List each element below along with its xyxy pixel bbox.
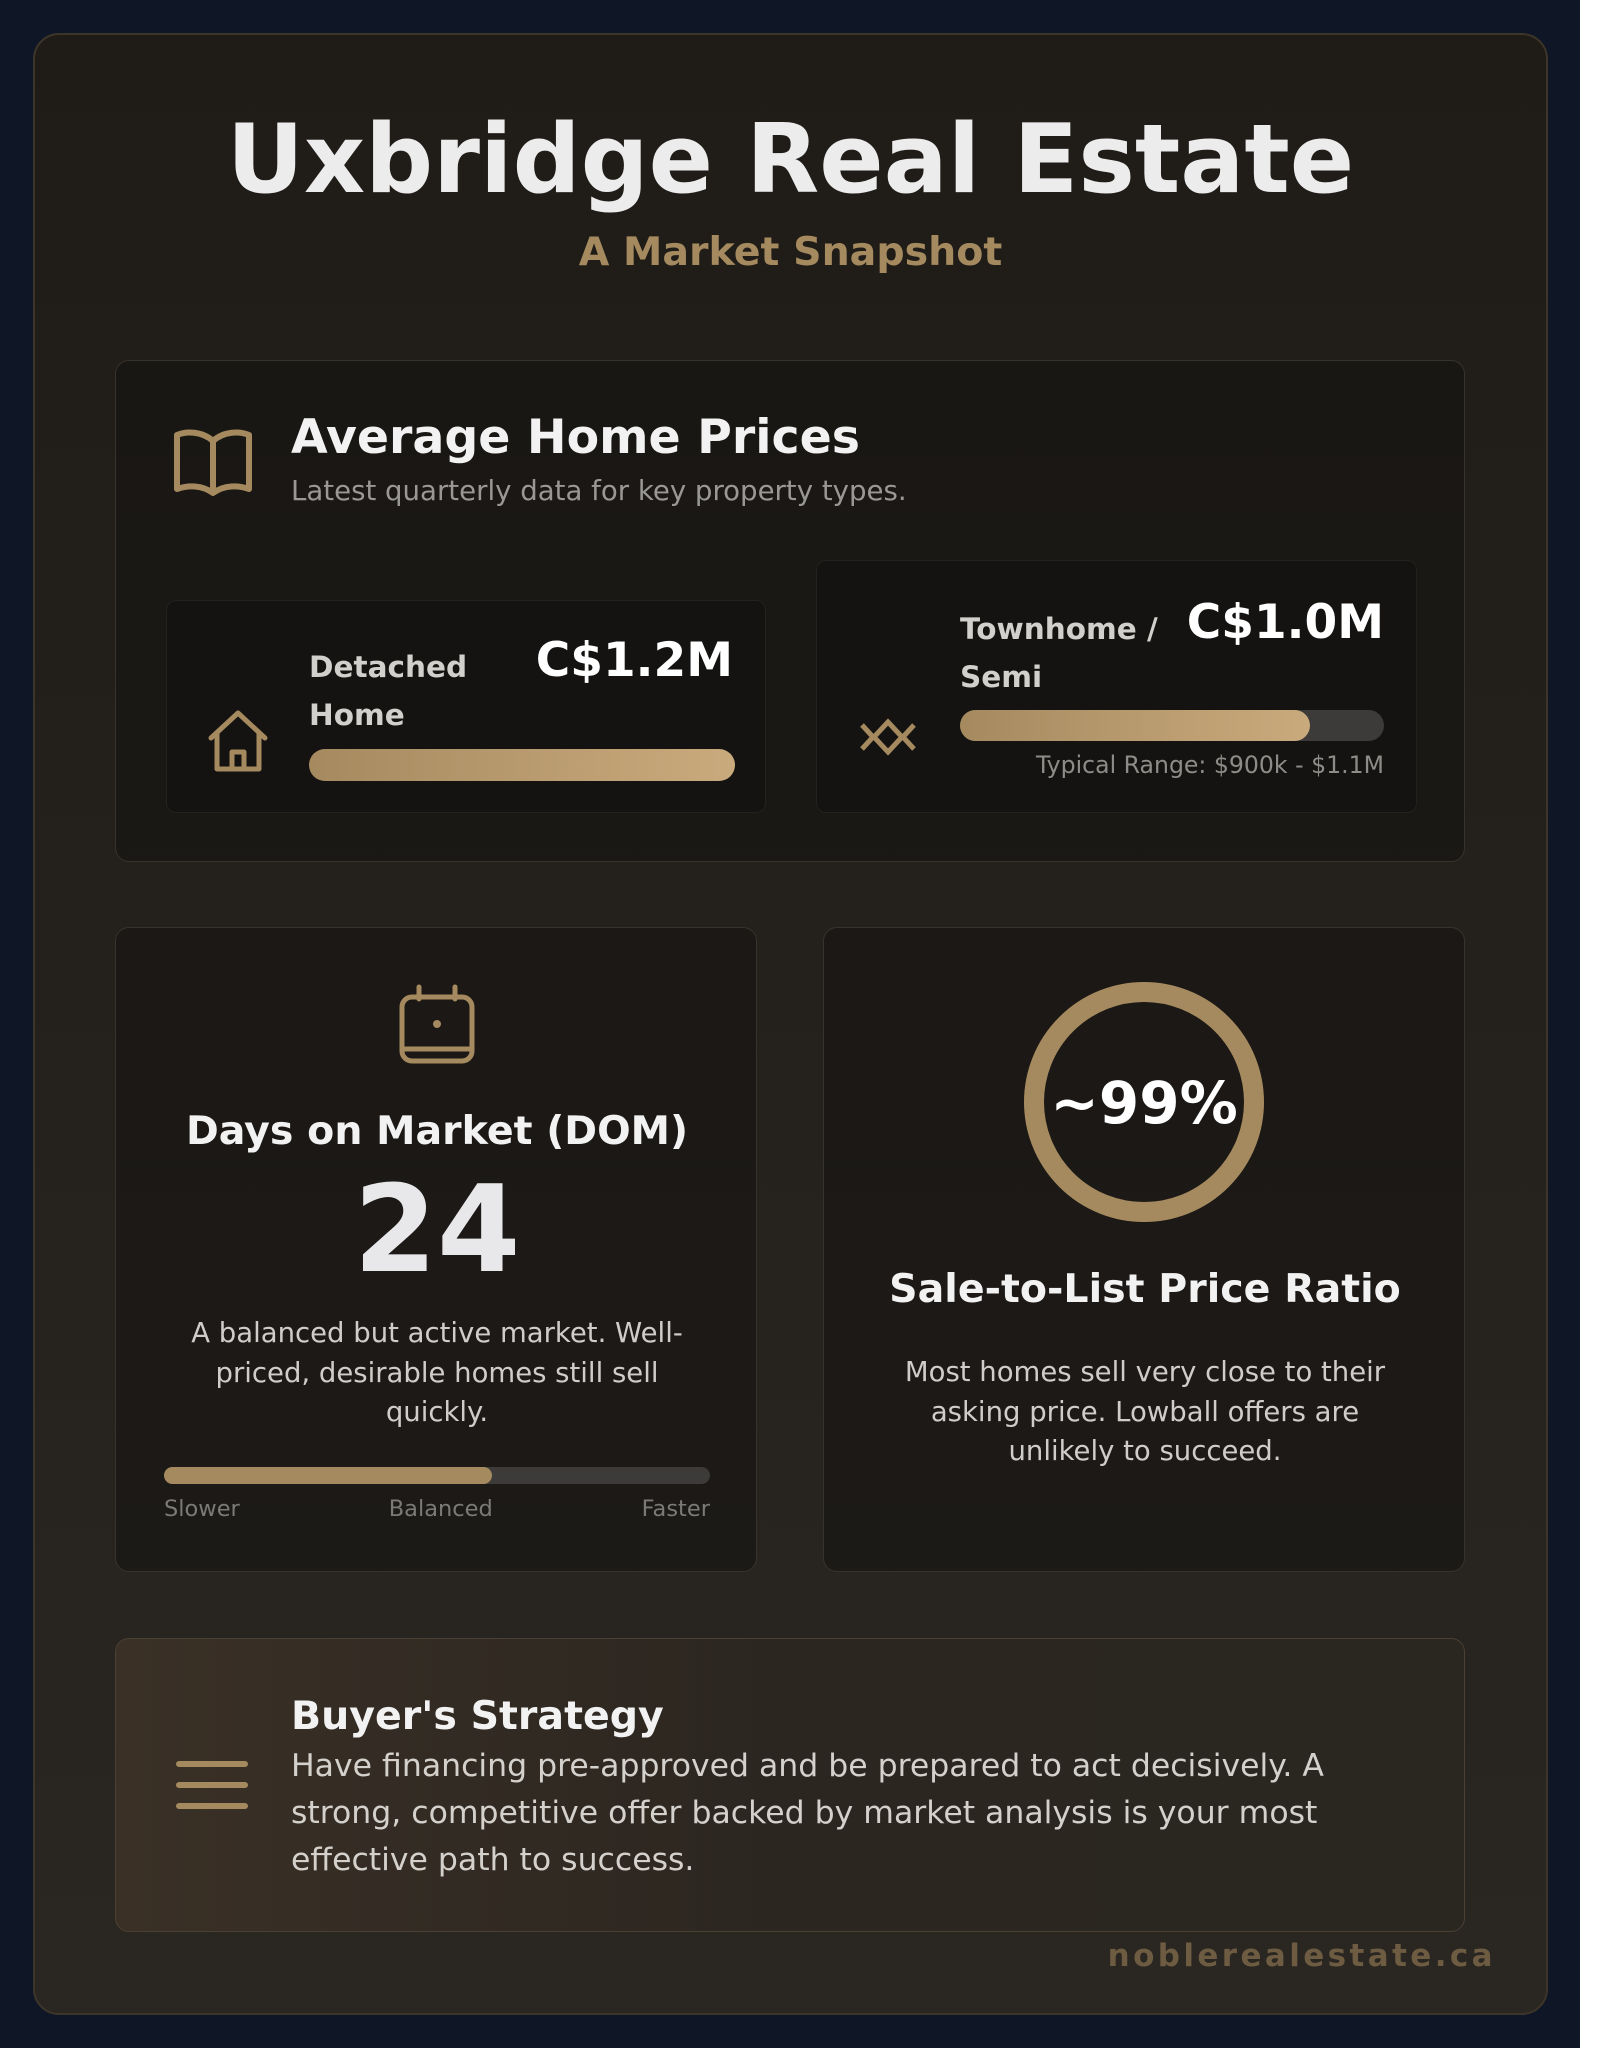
- ring chart: ~99%: [1050, 1069, 1238, 1137]
- body text: Have financing pre-approved and be prepared to act decisively. A strong, competitive offer backed by market analysis is your most effective path to success.: [291, 1748, 1324, 1878]
- subheading: Latest quarterly data for key property types.: [291, 474, 907, 507]
- icon: house: [208, 710, 268, 772]
- heading: Days on Market (DOM): [186, 1108, 688, 1154]
- icon: menu: [176, 1761, 248, 1809]
- ring chart: [1024, 982, 1264, 1222]
- label: [309, 650, 467, 732]
- gauge bar: [164, 1467, 710, 1484]
- icon: calendar: [400, 984, 474, 1064]
- label: [960, 612, 1158, 694]
- label: Detached: [309, 650, 467, 684]
- description: Most homes sell very close to their asking price. Lowball offers are unlikely to succeed.: [905, 1356, 1385, 1467]
- big number: 24: [354, 1161, 520, 1300]
- panel: sale to list: [823, 927, 1465, 1572]
- bar: [309, 749, 735, 781]
- label: Home: [309, 698, 405, 732]
- label: Semi: [960, 660, 1042, 694]
- panel: average home prices: [115, 360, 1465, 862]
- description: A balanced but active market. Well-priced, desirable homes still sell quickly.: [191, 1317, 683, 1428]
- gauge labels: [164, 1496, 710, 1522]
- gauge labels: Balanced: [389, 1496, 493, 1522]
- heading: Average Home Prices: [291, 410, 860, 465]
- gauge labels: Slower: [164, 1496, 240, 1522]
- range: Typical Range: $900k - $1.1M: [1036, 751, 1384, 779]
- icon: book: [174, 430, 252, 496]
- value: C$1.0M: [1187, 595, 1384, 650]
- subtitle: A Market Snapshot: [579, 229, 1002, 275]
- gauge labels: Faster: [642, 1496, 710, 1522]
- heading: Sale-to-List Price Ratio: [889, 1266, 1401, 1312]
- panel: buyer's strategy: [115, 1638, 1465, 1932]
- label: Townhome /: [960, 612, 1158, 646]
- bar: [960, 710, 1384, 741]
- panel: days on market: [115, 927, 757, 1572]
- heading: Buyer's Strategy: [291, 1693, 664, 1739]
- card: detached: [166, 600, 766, 813]
- footer: noblerealestate.ca: [1108, 1938, 1496, 1974]
- title: Uxbridge Real Estate: [227, 105, 1354, 215]
- value: C$1.2M: [536, 633, 733, 688]
- card: townhome: [816, 560, 1417, 813]
- icon: diamond: [860, 718, 916, 756]
